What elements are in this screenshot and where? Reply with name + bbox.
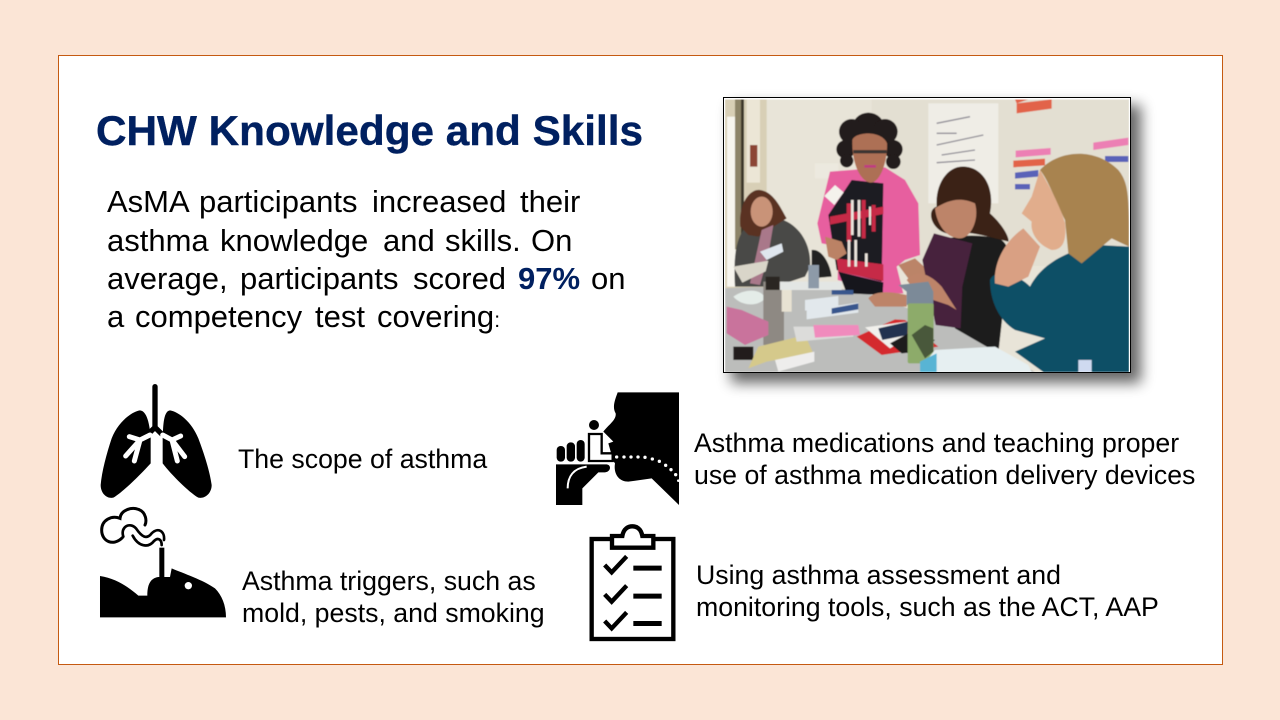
text block: intro paragraph: scored [413,261,506,296]
text block: intro paragraph: average, [107,261,228,296]
text block: intro paragraph: skills. [445,223,521,258]
green water bottle [898,282,933,305]
item: assessment tools: monitoring tools, such as the ACT, AAP [696,592,1159,622]
item: asthma medications: use of asthma medication delivery devices [694,460,1195,490]
title: CHW Knowledge and Skills [96,107,643,154]
table items [733,291,765,304]
text block: intro paragraph: on [591,261,625,296]
item: scope of asthma: The scope of asthma [238,444,487,474]
standing woman [817,167,920,293]
icon: smoke and head [100,508,226,617]
hair: standing woman [836,113,903,169]
text block: intro paragraph: : [494,309,500,332]
text block: intro paragraph: competency [135,299,303,334]
right woman [990,245,1129,372]
photo: CHW training session [724,98,1141,383]
left woman [734,218,810,287]
text block: intro paragraph: 97% [518,261,580,296]
icon: inhaler use [556,392,680,505]
text block: intro paragraph: and [383,223,435,258]
text block: intro paragraph: asthma [107,223,209,258]
text block: intro paragraph: covering [377,299,494,334]
item: asthma medications: Asthma medications and teaching proper [694,428,1179,458]
text block: intro paragraph: participants [199,184,358,219]
text block: intro paragraph: participants [240,261,399,296]
text block: intro paragraph: test [315,299,365,334]
seated woman [950,235,1007,350]
item: asthma triggers: Asthma triggers, such as [242,566,536,596]
text block: intro paragraph: their [520,184,580,219]
text block: intro paragraph: a [107,299,125,334]
icon: checklist clipboard [592,526,673,639]
panel: main white card [58,56,1222,664]
text block: intro paragraph: On [531,223,572,258]
table [725,287,1035,372]
icon: lungs [101,387,212,498]
text block: intro paragraph: AsMA [107,184,190,219]
text block: intro paragraph: knowledge [220,223,368,258]
item: asthma triggers: mold, pests, and smoking [242,598,545,628]
item: assessment tools: Using asthma assessment and [696,560,1061,590]
text block: intro paragraph: increased [372,184,506,219]
